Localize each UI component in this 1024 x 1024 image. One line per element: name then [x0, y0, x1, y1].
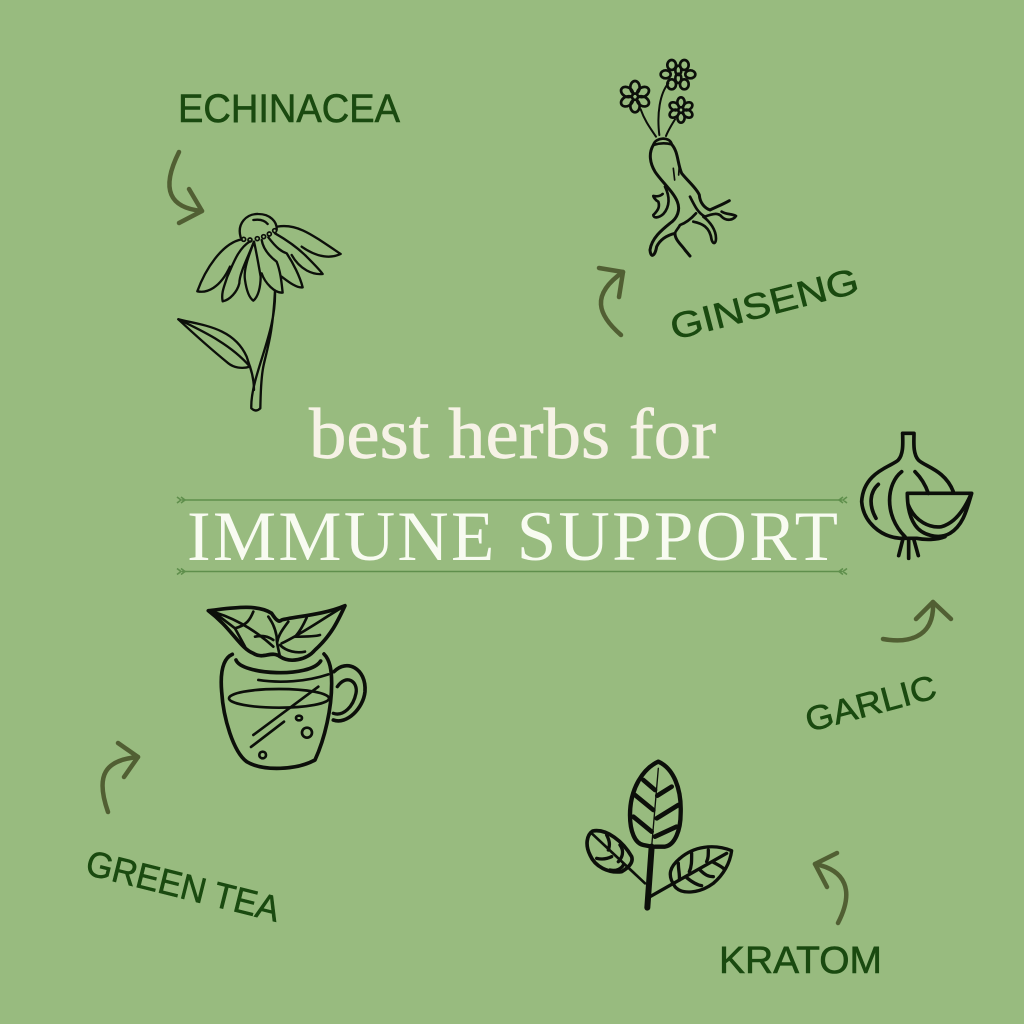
icon: Garlic: [862, 433, 972, 558]
arrow: Kratom: [815, 853, 846, 923]
label: Echinacea: ECHINACEA: [178, 87, 400, 131]
arrow: Green tea: [102, 743, 138, 812]
icon: Green tea cup: [208, 606, 365, 768]
icon: Ginseng root: [619, 60, 736, 256]
arrow: Ginseng: [599, 268, 623, 335]
label: Green tea: GREEN TEA: [82, 842, 284, 930]
icon: Kratom leaves: [587, 762, 732, 908]
label: Garlic: GARLIC: [801, 668, 941, 740]
title: best herbs for: best herbs for: [309, 394, 716, 474]
label: Kratom: KRATOM: [719, 940, 882, 982]
icon: Echinacea flower: [178, 214, 341, 410]
decorative rule: bottom: [177, 568, 847, 574]
arrow: Garlic: [883, 602, 951, 640]
title: immune support: IMMUNE SUPPORT: [187, 498, 838, 576]
arrow: Echinacea: [169, 152, 202, 223]
label: Ginseng: GINSENG: [666, 260, 863, 348]
decorative rule: top: [177, 497, 847, 503]
